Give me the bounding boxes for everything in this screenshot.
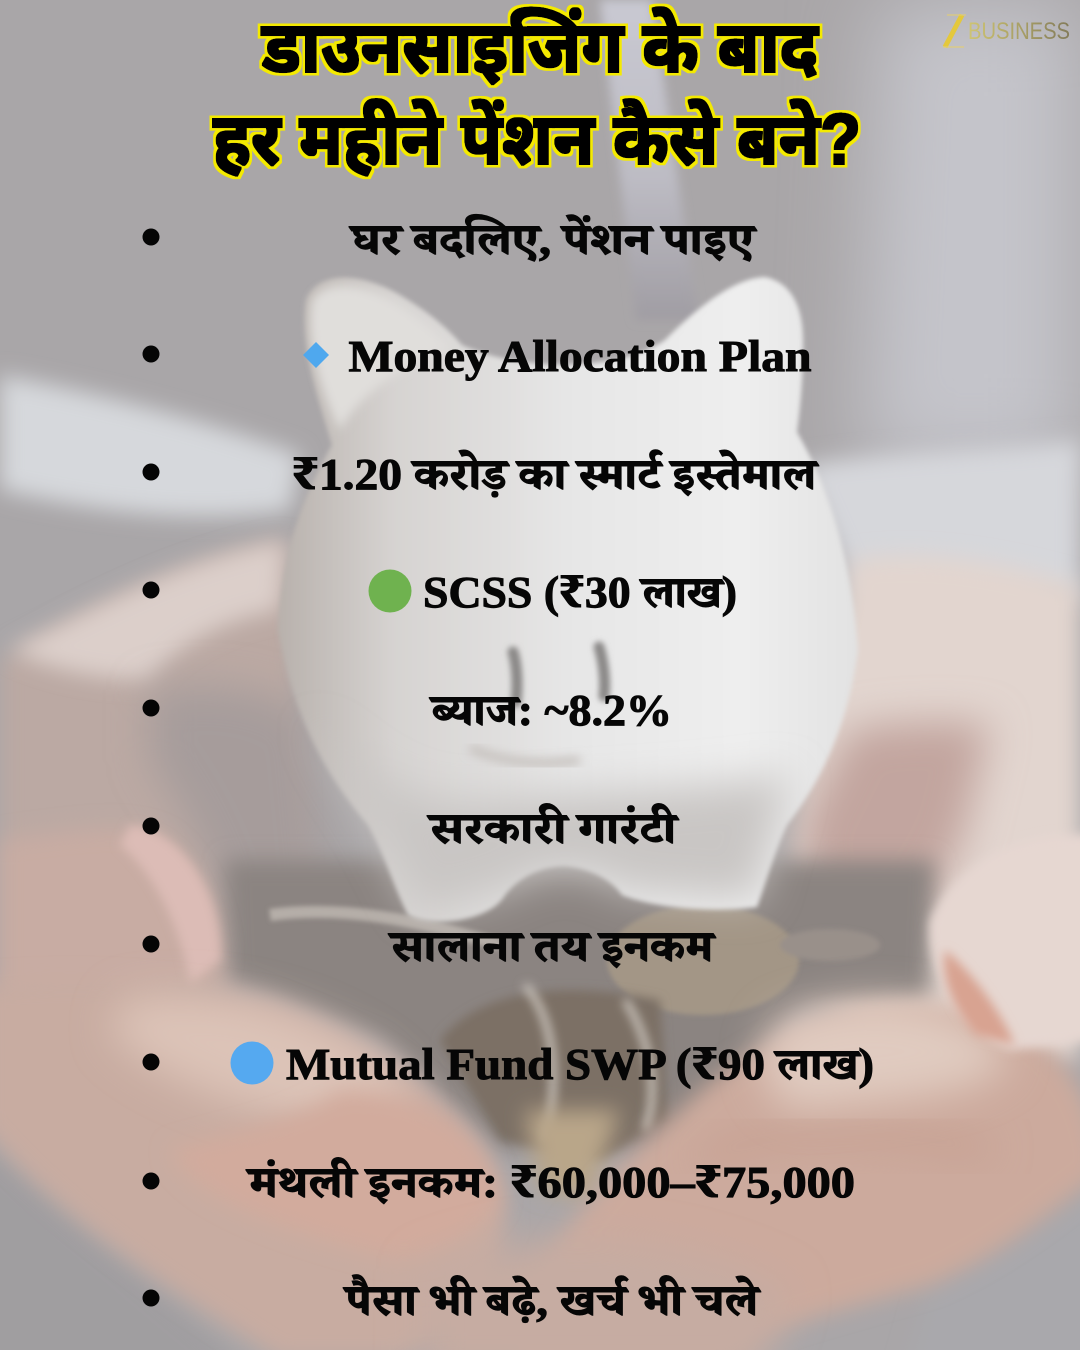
lower palm, right	[519, 1006, 1080, 1350]
sweater, right side	[860, 0, 1080, 470]
pig left ear, lit	[310, 286, 450, 430]
item: move house, get pension: घर बदलिए, पेंशन पाइए	[349, 214, 758, 264]
palm pad, right	[763, 1001, 1010, 1110]
title line 1: डाउनसाइजिंग के बाद	[261, 7, 819, 88]
sweater, right light stripe	[800, 440, 1080, 600]
left thumb / finger	[0, 828, 220, 1000]
item: fixed annual income: सालाना तय इनकम	[388, 922, 716, 971]
item: government guarantee: सरकारी गारंटी	[427, 803, 680, 853]
bullet list	[142, 214, 874, 1325]
right thumb	[930, 834, 1080, 1050]
palm pink ridge	[170, 1090, 500, 1258]
piggy bank	[278, 277, 858, 922]
logo: Z Business	[943, 15, 1070, 47]
title line 2: हर महीने पेंशन कैसे बने?	[213, 99, 861, 180]
bottom centre	[420, 1238, 790, 1350]
coin stack, centre	[440, 990, 668, 1160]
sweater, left light stripes	[0, 375, 300, 516]
coin ring, left	[270, 912, 500, 945]
right thumb pink	[944, 950, 1015, 1045]
title	[213, 7, 861, 180]
sweater, light vertical band	[600, 0, 698, 320]
shadow under pig	[225, 860, 935, 1150]
coin, big round	[607, 905, 799, 1015]
item: money grows, expenses run: पैसा भी बढ़े, खर्च भी चले	[343, 1274, 761, 1325]
pig eyes	[513, 652, 517, 702]
icon: blue diamond	[303, 342, 329, 368]
left hand, lit top edge	[10, 540, 285, 680]
bullet markers	[142, 228, 160, 1306]
lower gray, corners	[0, 1125, 280, 1350]
item: interest rate: ब्याज: ~8.2%	[429, 686, 672, 735]
left finger pink tip	[120, 825, 220, 985]
coin lower gold	[525, 1110, 620, 1200]
icon: blue circle	[230, 1042, 274, 1084]
coin, right flat	[780, 929, 880, 961]
right hand, shaded fingers	[800, 722, 990, 930]
item: SCSS 30 lakh: SCSS (₹30 लाख)	[423, 568, 737, 617]
right palm creases	[700, 1132, 990, 1160]
left hand, back	[0, 540, 300, 1000]
lower palm, left	[0, 981, 505, 1350]
right hand	[780, 556, 1080, 1060]
coin edges	[525, 985, 652, 1140]
icon: green circle	[368, 570, 412, 612]
item: smart use of 1.20 crore: ₹1.20 करोड़ का स्मार्ट इस्तेमाल	[292, 448, 819, 499]
pig snout crease	[470, 748, 580, 763]
item: money allocation plan: Money Allocation Plan	[348, 332, 812, 381]
palm pad, left	[110, 996, 408, 1130]
left hand, shaded inner	[150, 686, 330, 1000]
pig lower shading	[310, 720, 790, 912]
item: monthly income: मंथली इनकम: ₹60,000–₹75,000	[246, 1157, 855, 1207]
item: mutual fund SWP 90 lakh: Mutual Fund SWP (₹90 लाख)	[286, 1040, 874, 1089]
